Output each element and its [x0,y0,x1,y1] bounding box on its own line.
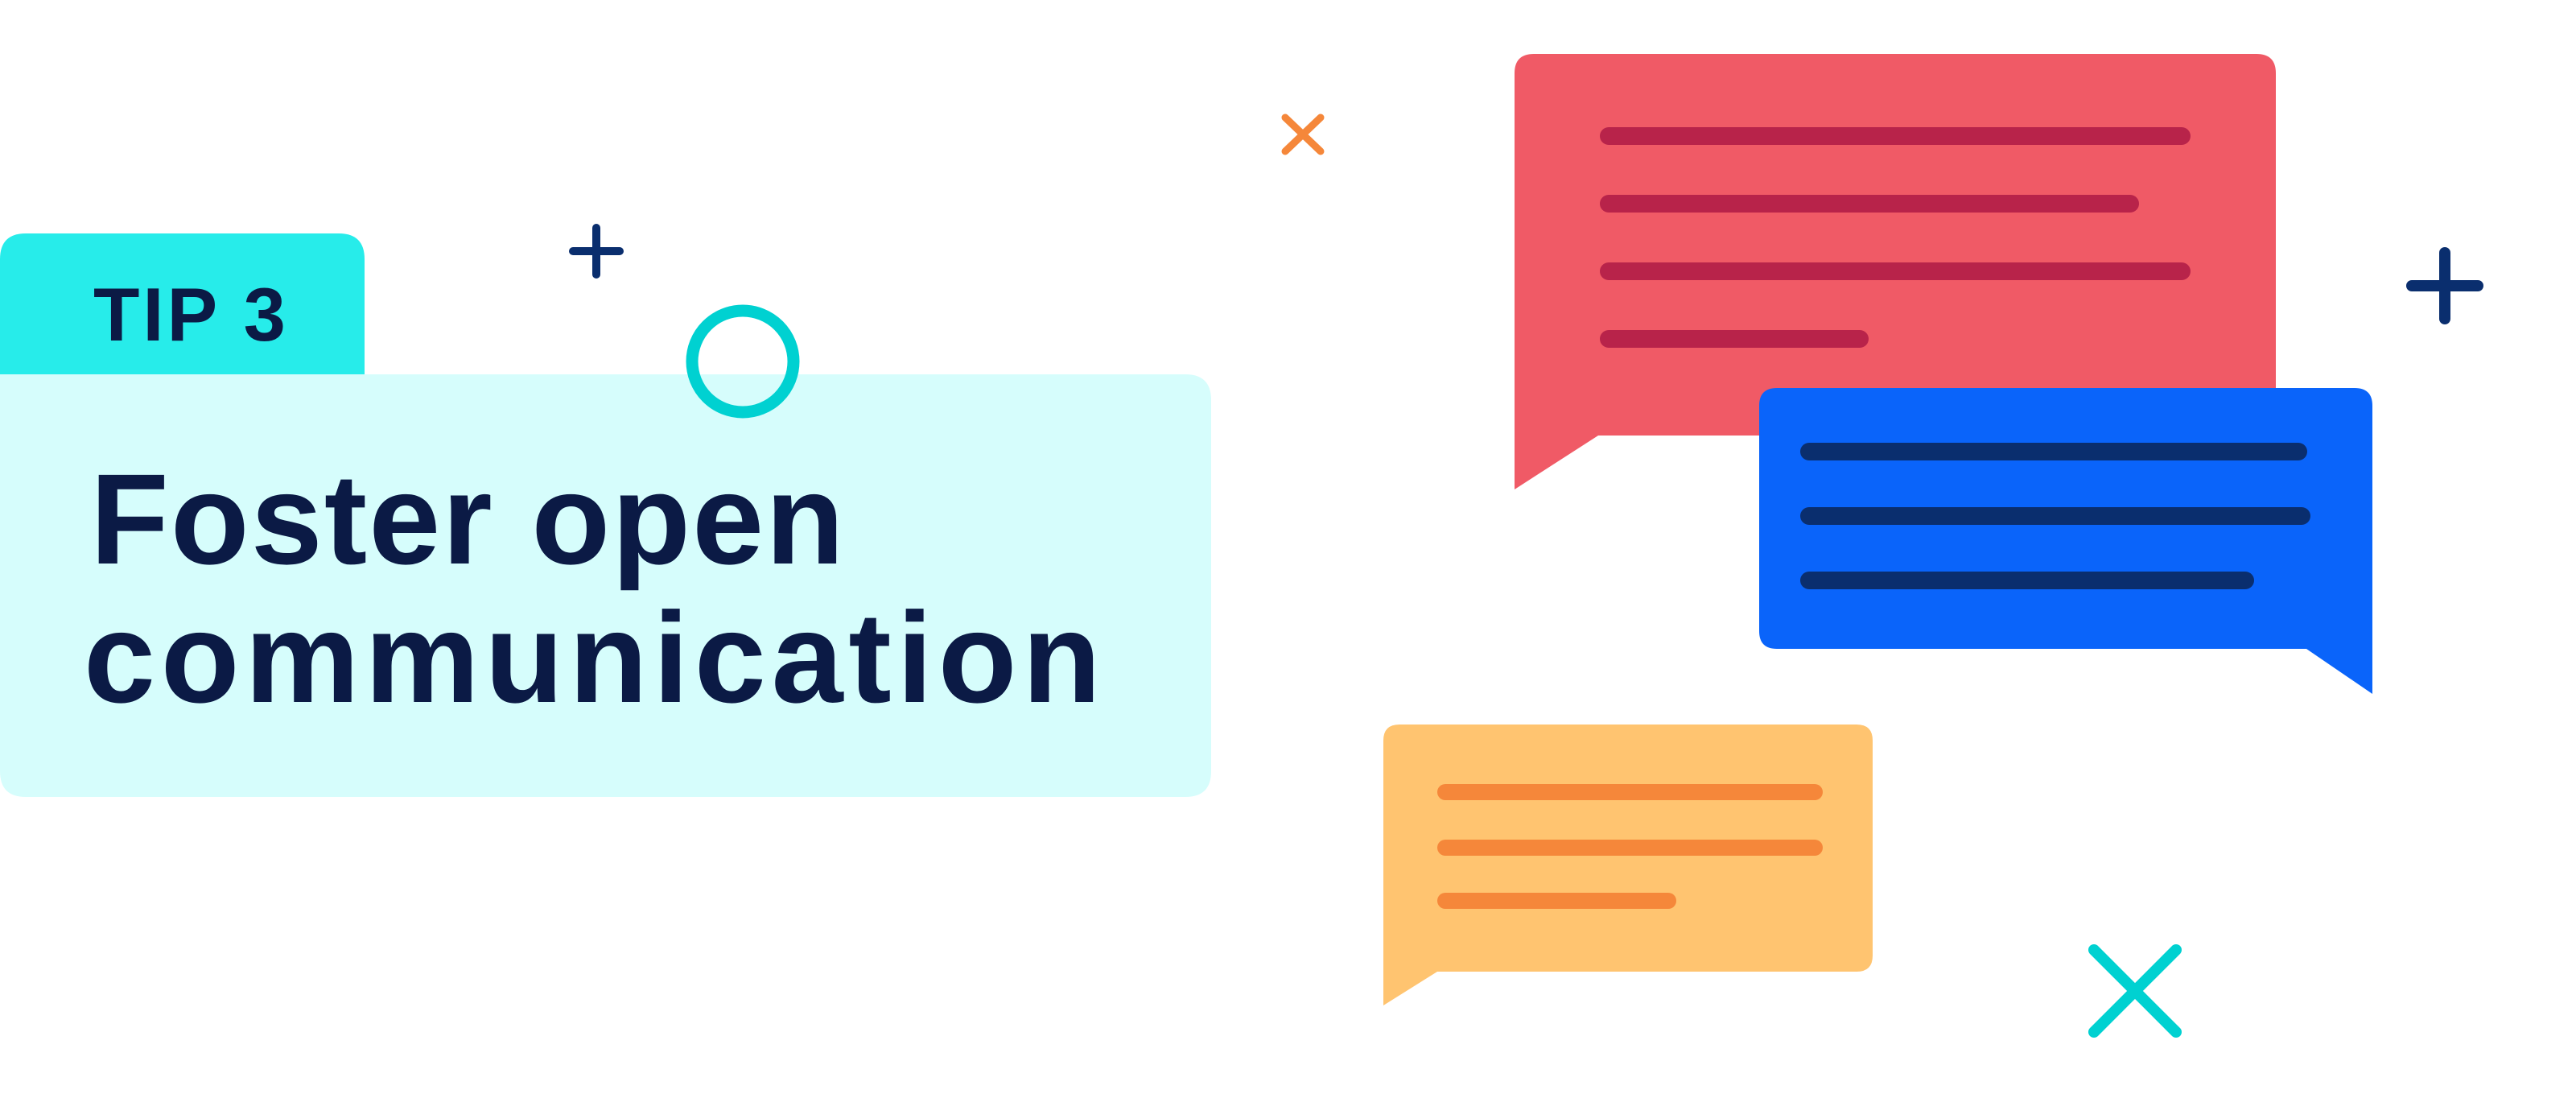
icon: orange x [1285,118,1321,151]
icon: small plus [573,228,620,275]
icon: cyan x [2094,950,2176,1032]
title panel [0,374,1211,797]
red speech bubble [1515,54,2276,489]
tip tab [0,233,365,374]
icon: right plus [2412,253,2478,319]
blue speech bubble [1759,388,2372,694]
yellow speech bubble [1383,725,1873,1005]
tip label: TIP 3 [93,272,289,357]
title text: communication [84,585,1101,729]
icon: ring [692,311,793,412]
title text: Foster open [90,447,844,591]
